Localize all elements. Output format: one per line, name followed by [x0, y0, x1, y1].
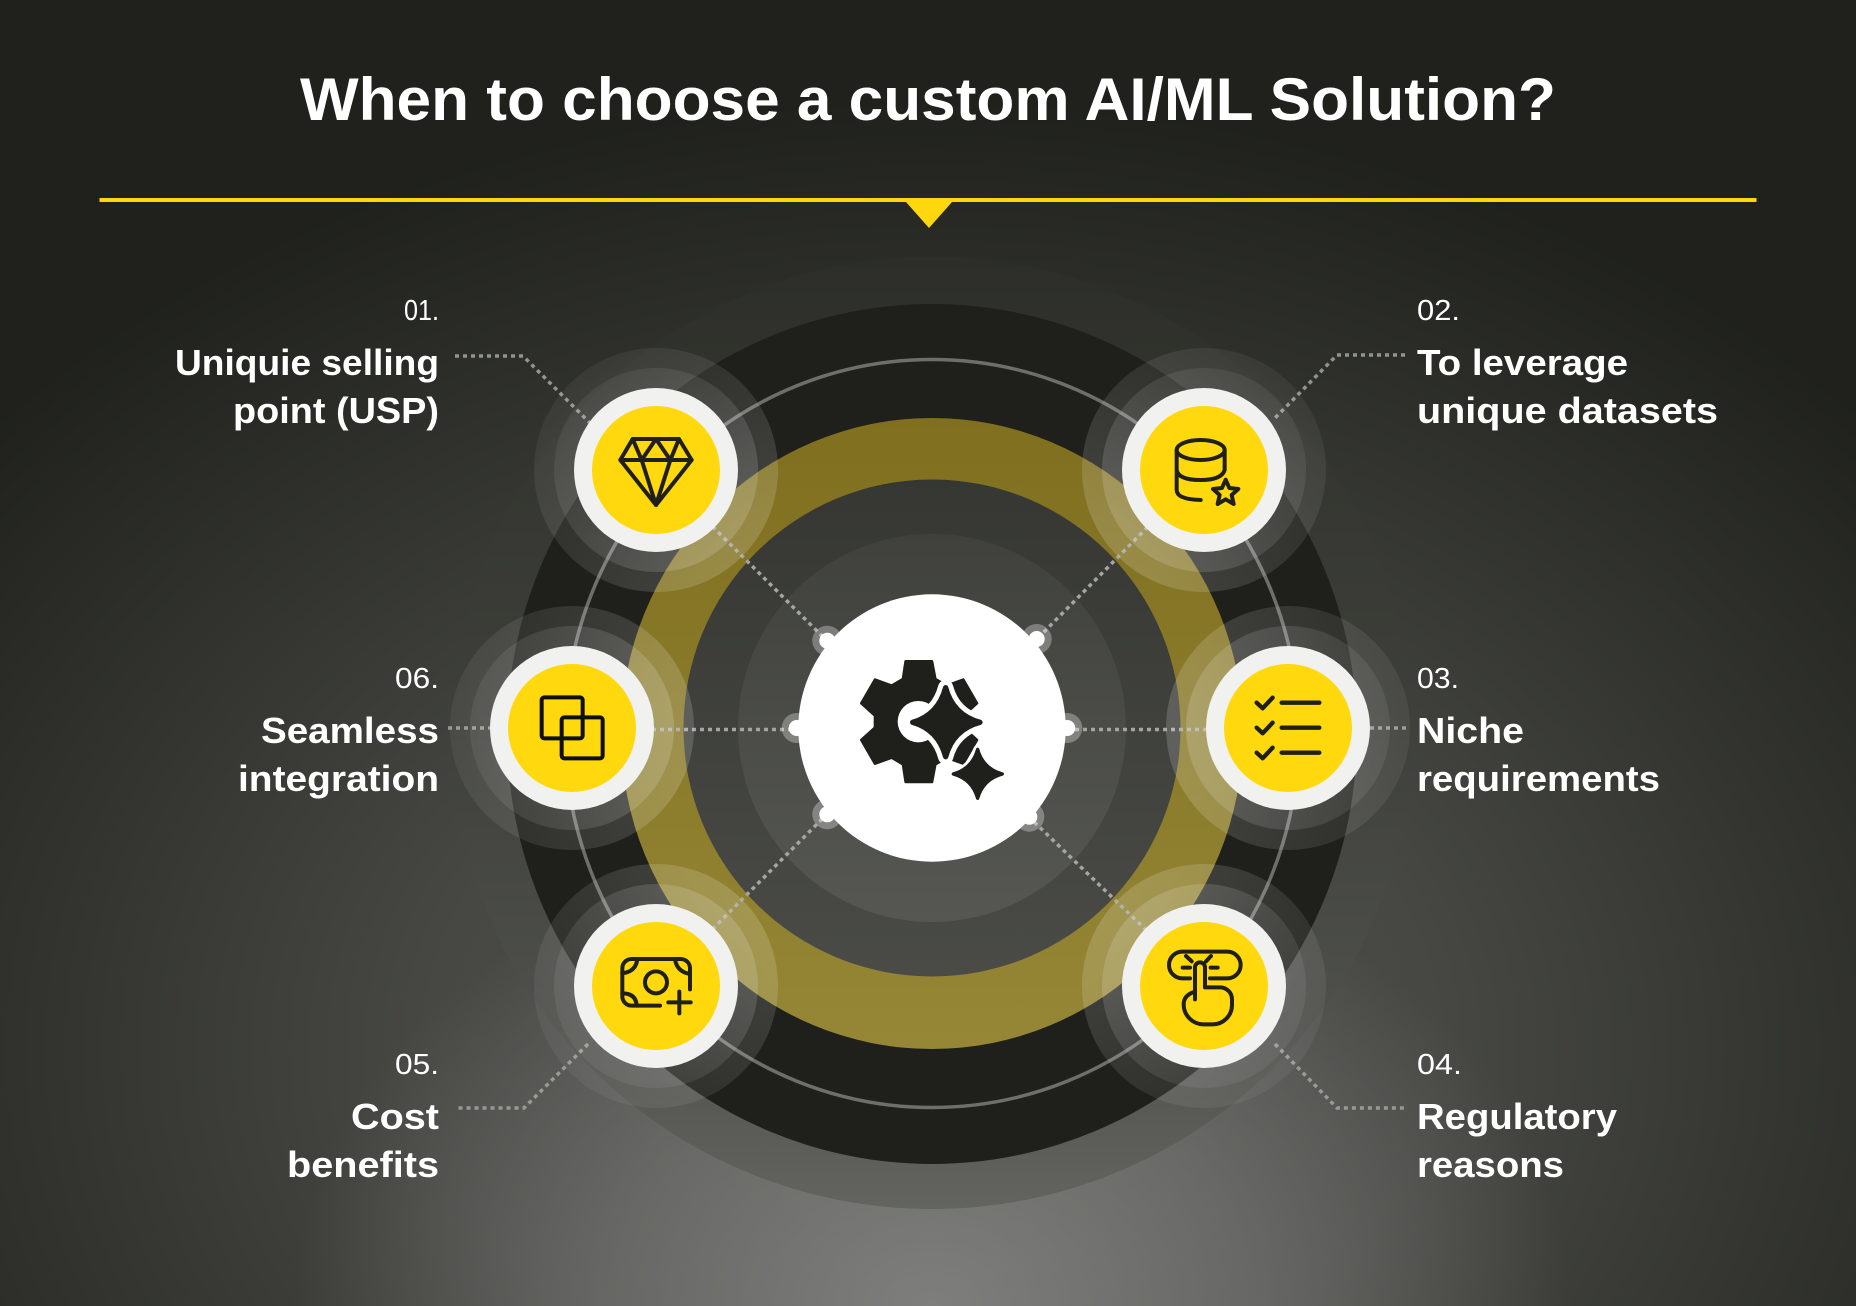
label 04: 04.: [1417, 1049, 1462, 1081]
label 02: 02.: [1417, 295, 1460, 327]
label 03: requirements: [1417, 758, 1660, 799]
concentric rings: [452, 257, 1412, 1209]
label 05: [287, 1049, 439, 1185]
icon: finger tapping a button: [1169, 952, 1241, 1024]
label 06: 06.: [395, 663, 439, 695]
label 01: point (USP): [233, 390, 439, 431]
yellow ring: [621, 418, 1243, 1049]
connector dots: [782, 624, 1082, 832]
center hub: [782, 594, 1082, 862]
label 01: 01.: [404, 295, 439, 327]
icon: database with star: [1177, 440, 1238, 504]
label 04: reasons: [1417, 1144, 1564, 1185]
label 01: [175, 295, 439, 431]
label 05: benefits: [287, 1144, 439, 1185]
label 02: unique datasets: [1417, 390, 1718, 431]
node 01: diamond: [534, 348, 778, 592]
icon: overlapping squares: [542, 697, 603, 758]
label 02: [1417, 295, 1718, 431]
node 05: money: [534, 864, 778, 1108]
label 06: Seamless: [261, 710, 439, 751]
icon: checklist: [1257, 698, 1319, 758]
thin ring: [565, 360, 1299, 1108]
label 04: Regulatory: [1417, 1096, 1617, 1137]
label 06: [238, 663, 439, 799]
node 04: hand tap: [1082, 864, 1326, 1108]
dark ring: [507, 304, 1357, 1164]
label 05: 05.: [395, 1049, 439, 1081]
title: When to choose a custom AI/ML Solution?: [300, 66, 1556, 133]
label 05: Cost: [351, 1096, 439, 1137]
innermost disk: [738, 534, 1126, 922]
icon: gear with sparkles: [861, 661, 1002, 798]
label 03: 03.: [1417, 663, 1459, 695]
label 01: Uniquie selling: [175, 342, 439, 383]
dotted connectors: [448, 355, 1408, 1108]
label 02: To leverage: [1417, 342, 1628, 383]
label 03: Niche: [1417, 710, 1524, 751]
icon: banknote with plus: [622, 959, 691, 1013]
node 06: overlapping squares: [450, 606, 694, 850]
icon: diamond: [620, 439, 692, 505]
label 04: [1417, 1049, 1617, 1185]
yellow divider with pointer: [100, 198, 1756, 228]
label 03: [1417, 663, 1660, 799]
label 06: integration: [238, 758, 439, 799]
node 03: checklist: [1166, 606, 1410, 850]
inner disk: [684, 480, 1180, 976]
node 02: database: [1082, 348, 1326, 592]
